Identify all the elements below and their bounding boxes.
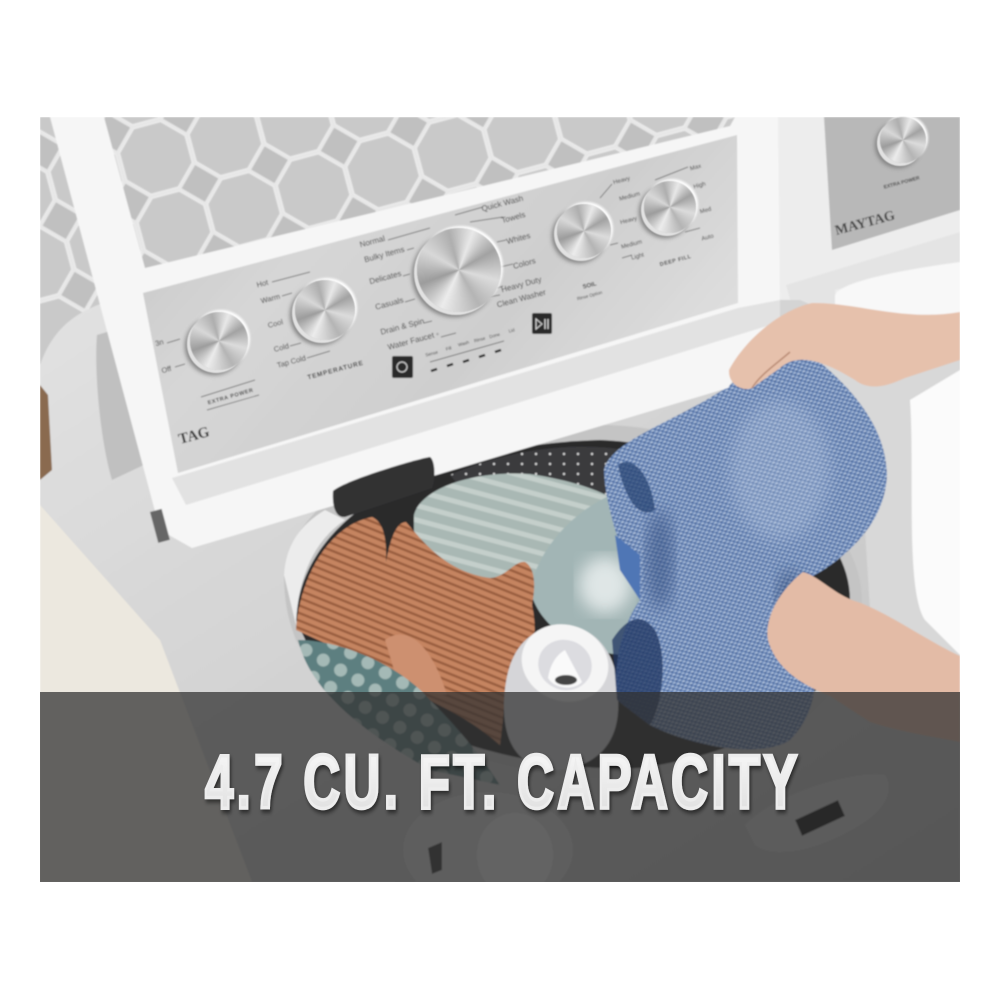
control dials (182, 116, 930, 378)
dial: soil (557, 204, 611, 258)
lid frame (50, 117, 780, 548)
panel labels: DEEP FILL (659, 254, 692, 268)
panel labels: SOIL (582, 281, 598, 291)
panel labels: 3n (154, 337, 165, 348)
top hand (729, 303, 960, 389)
panel labels: Heavy (620, 216, 638, 226)
dial: cycle selector (417, 228, 501, 312)
panel labels: Light (631, 252, 645, 262)
lower hand (767, 572, 960, 742)
panel labels: Cold (273, 341, 290, 354)
wall tiles (40, 117, 100, 364)
panel labels (154, 164, 715, 406)
photo: laundry scene (40, 117, 960, 882)
right washer: EXTRA POWER (883, 175, 921, 191)
dial: extra power (190, 312, 248, 370)
green striped towel (414, 473, 650, 655)
panel leader lines (167, 167, 700, 410)
panel labels: TEMPERATURE (307, 360, 364, 381)
counter (40, 506, 180, 692)
panel labels: Casuals (374, 295, 404, 312)
panel labels: Heavy Duty (500, 275, 542, 294)
washer body (40, 296, 960, 882)
dial: deep fill (644, 181, 696, 233)
panel labels: Medium (621, 239, 643, 251)
panel labels: EXTRA POWER (207, 388, 254, 406)
play pause button (532, 313, 552, 334)
panel labels: Fill (445, 345, 452, 352)
panel labels: Auto (701, 233, 715, 243)
panel labels: Warm (260, 292, 281, 305)
panel labels: Medium (619, 191, 641, 203)
panel labels: Delicates (368, 269, 402, 286)
caption band (40, 692, 960, 882)
panel labels: Clean Washer (496, 288, 547, 309)
panel labels: Towels (500, 210, 526, 225)
dial: neighbouring washer (880, 117, 926, 163)
panel labels: Done (489, 332, 501, 339)
power button (392, 356, 413, 378)
blue towel (604, 349, 887, 749)
panel labels: Quick Wash (481, 194, 524, 213)
panel labels: Wash (457, 340, 470, 347)
panel labels: Hot (256, 277, 270, 289)
hinge (150, 509, 170, 543)
panel labels: Off (160, 364, 173, 375)
left wall edge (40, 385, 52, 480)
orange towel (296, 517, 535, 745)
right side of top deck (862, 360, 960, 656)
right washer (778, 117, 960, 304)
panel labels: Heavy (613, 176, 631, 186)
caption: 4.7 CU. FT. CAPACITY (205, 739, 797, 824)
panel labels: Sense (425, 349, 439, 358)
panel labels: Drain & Spin (379, 316, 425, 337)
lid window onto wall tiles (104, 117, 735, 268)
panel labels: Rinse Option (576, 290, 603, 301)
panel labels: Med (699, 207, 712, 215)
tub (284, 425, 862, 779)
right washer: MAYTAG (833, 208, 897, 239)
panel labels: Rinse (473, 336, 486, 343)
panel labels: Bulky Items (363, 245, 405, 264)
panel labels: Cool (267, 317, 284, 330)
panel labels: Max (689, 164, 702, 172)
panel labels: Whites (505, 231, 531, 246)
panel labels: Lid (508, 327, 516, 334)
agitator (504, 612, 619, 770)
dial: temperature (295, 280, 355, 340)
panel labels: Colors (512, 256, 537, 271)
panel labels: Normal (359, 234, 386, 249)
brand fragment: TAG (177, 424, 212, 448)
panel labels: Water Faucet ◦ (387, 329, 440, 352)
panel labels: Tap Cold (276, 353, 307, 370)
front deck details (428, 800, 845, 881)
lid catch (333, 457, 434, 517)
teal dotted towel (298, 640, 500, 785)
control panel (143, 135, 738, 473)
panel labels: High (693, 182, 706, 191)
status lights (431, 350, 501, 371)
